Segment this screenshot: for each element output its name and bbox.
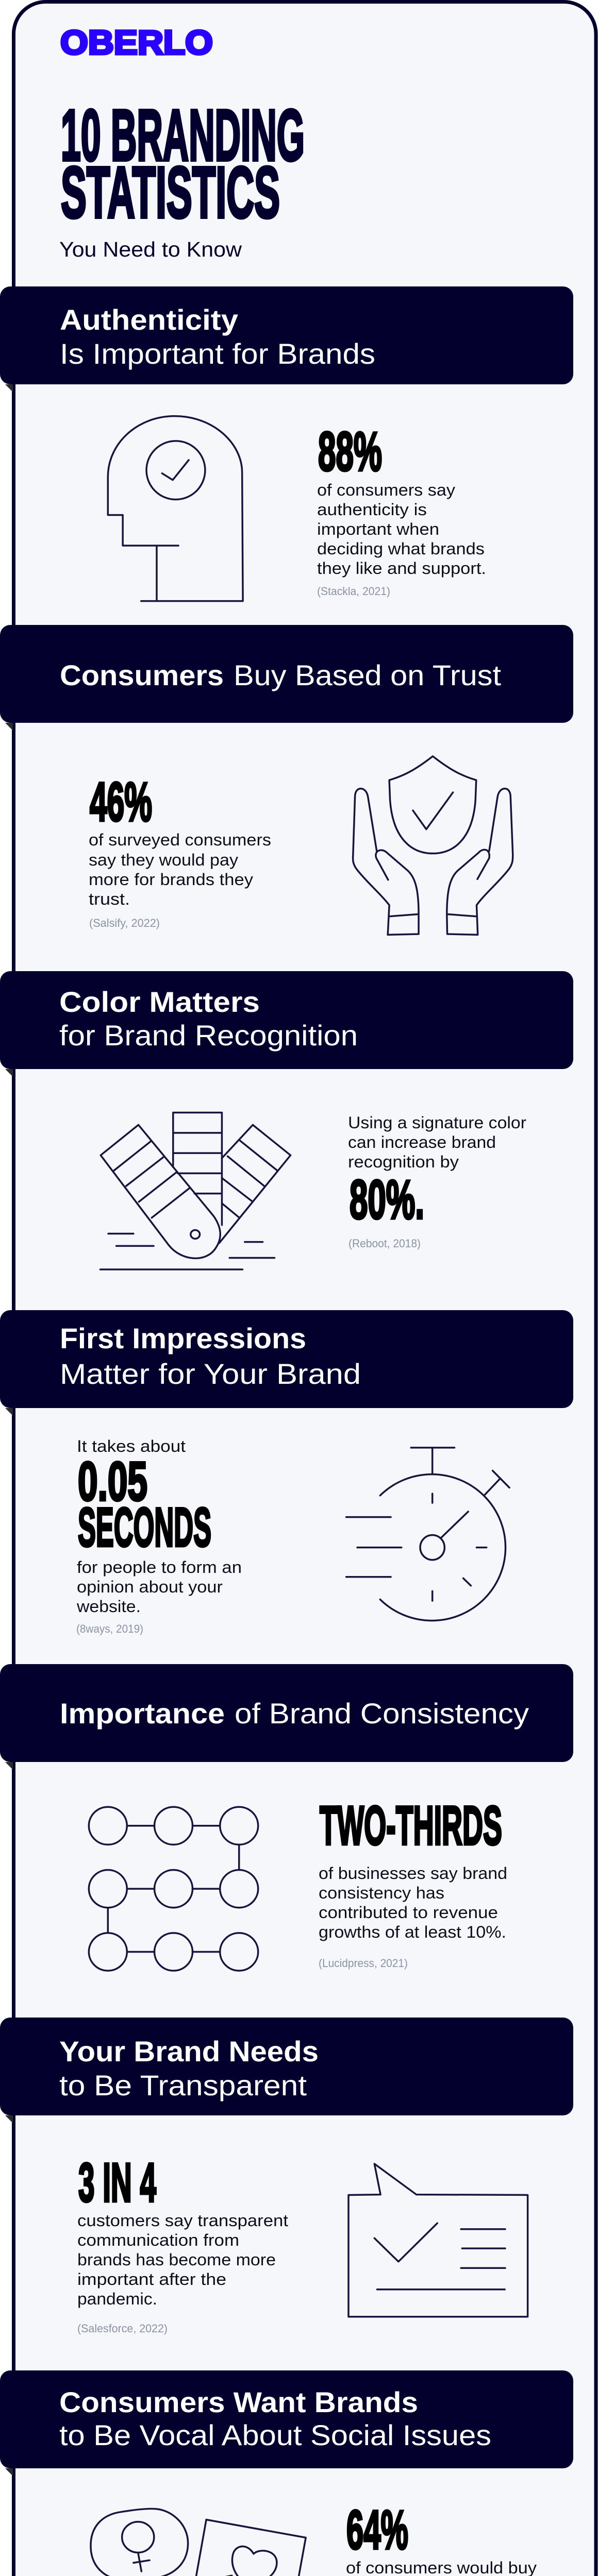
- heading: transparency: Your Brand Needs: [59, 2035, 319, 2067]
- heading: consistency: [0, 1664, 573, 1770]
- source: Salsify: (Salsify, 2022): [89, 917, 160, 929]
- icon: stopwatch: [346, 1448, 509, 1621]
- subtitle: You Need to Know: [59, 238, 242, 261]
- text: color description: [348, 1113, 526, 1171]
- text: authenticity description: [317, 481, 486, 578]
- panel: consistency: [0, 1664, 573, 1971]
- text: authenticity description: they like and support.: [317, 559, 486, 578]
- text: first impressions description: website.: [76, 1597, 141, 1616]
- stat: 3 in 4: 3 IN 4: [78, 2151, 156, 2213]
- heading: first impressions: First Impressions: [60, 1322, 306, 1354]
- title: [61, 94, 305, 233]
- text: first impressions description: for people to form an: [77, 1558, 242, 1577]
- text: consistency description: of businesses say brand: [319, 1864, 507, 1883]
- icon: hands holding shield: [353, 756, 513, 935]
- text: transparency description: customers say transparent: [77, 2211, 288, 2230]
- text: trust description: of surveyed consumers: [89, 831, 271, 849]
- stat: 0.05 seconds: 0.05: [78, 1450, 147, 1512]
- panel: social issues: [0, 2370, 573, 2576]
- stat: 46%: 46%: [90, 771, 152, 833]
- heading: color: [0, 971, 573, 1077]
- text: intro: It takes about: [77, 1437, 186, 1455]
- text: consistency description: contributed to revenue: [319, 1903, 498, 1922]
- heading: first impressions: Matter for Your Brand: [60, 1358, 361, 1390]
- heading: trust: Buy Based on Trust: [234, 659, 501, 691]
- heading: transparency: to Be Transparent: [59, 2069, 307, 2102]
- panel: transparency: [0, 2018, 573, 2335]
- panel: trust: [0, 625, 573, 935]
- heading: transparency: [0, 2018, 573, 2123]
- text: authenticity description: authenticity is: [317, 500, 427, 519]
- icon: protest signs: [91, 2509, 306, 2576]
- panel: authenticity: [0, 286, 573, 601]
- heading: authenticity: Authenticity: [60, 303, 238, 336]
- text: 10 BRANDING: [61, 94, 305, 176]
- text: transparency description: [77, 2211, 288, 2308]
- source: Stackla: (Stackla, 2021): [317, 585, 390, 598]
- text: first impressions description: opinion about your: [77, 1578, 223, 1596]
- text: consistency description: growths of at least 10%.: [319, 1923, 506, 1941]
- text: trust description: more for brands they: [89, 870, 253, 889]
- heading: social issues: to Be Vocal About Social Issues: [59, 2419, 491, 2451]
- stat: 64%: 64%: [346, 2499, 408, 2561]
- text: transparency description: brands has become more: [77, 2250, 276, 2269]
- text: authenticity description: deciding what brands: [317, 539, 485, 558]
- text: first impressions description: [76, 1558, 242, 1616]
- icon: connected nodes: [89, 1807, 258, 1971]
- heading: social issues: [0, 2370, 573, 2476]
- text: trust description: [89, 831, 271, 908]
- text: trust description: trust.: [89, 890, 130, 908]
- stat: 80%: 80%.: [350, 1168, 424, 1230]
- icon: colour swatches: [101, 1113, 291, 1269]
- text: authenticity description: of consumers say: [317, 481, 455, 499]
- text: transparency description: pandemic.: [77, 2290, 157, 2308]
- text: color description: Using a signature color: [348, 1113, 526, 1132]
- panel: first impressions: SECONDS: [78, 1496, 211, 1558]
- text: transparency description: communication from: [77, 2231, 239, 2249]
- source: Reboot: (Reboot, 2018): [348, 1237, 421, 1250]
- text: color description: recognition by: [348, 1153, 459, 1171]
- heading: social issues: Consumers Want Brands: [59, 2386, 418, 2418]
- text: color description: can increase brand: [348, 1133, 496, 1151]
- source: Salesforce: (Salesforce, 2022): [77, 2322, 168, 2335]
- title: STATISTICS: [61, 151, 280, 233]
- heading: trust: Consumers: [60, 659, 224, 691]
- heading: authenticity: [0, 286, 573, 392]
- text: consistency description: [319, 1864, 507, 1941]
- heading: first impressions: [0, 1310, 573, 1416]
- text: authenticity description: important when: [317, 520, 439, 538]
- text: transparency description: important after the: [77, 2270, 226, 2289]
- stat: 88%: 88%: [318, 420, 382, 482]
- heading: authenticity: Is Important for Brands: [60, 337, 375, 370]
- heading: consistency: of Brand Consistency: [235, 1697, 529, 1730]
- heading: trust: [0, 625, 573, 731]
- heading: consistency: Importance: [60, 1697, 225, 1730]
- panel: first impressions: [0, 1310, 573, 1635]
- heading: color: for Brand Recognition: [59, 1019, 358, 1052]
- text: consistency description: consistency has: [319, 1884, 444, 1902]
- stat: 0.05 seconds: [78, 1450, 211, 1558]
- text: trust description: say they would pay: [89, 851, 238, 869]
- heading: color: Color Matters: [59, 986, 260, 1018]
- logo: Oberlo: OBERLO: [60, 23, 213, 61]
- panel: color: [0, 971, 573, 1269]
- icon: head with check: [108, 416, 243, 601]
- icon: speech bubble with checkmark: [348, 2164, 528, 2317]
- source: 8ways: (8ways, 2019): [76, 1622, 143, 1635]
- source: Lucidpress: (Lucidpress, 2021): [319, 1957, 408, 1970]
